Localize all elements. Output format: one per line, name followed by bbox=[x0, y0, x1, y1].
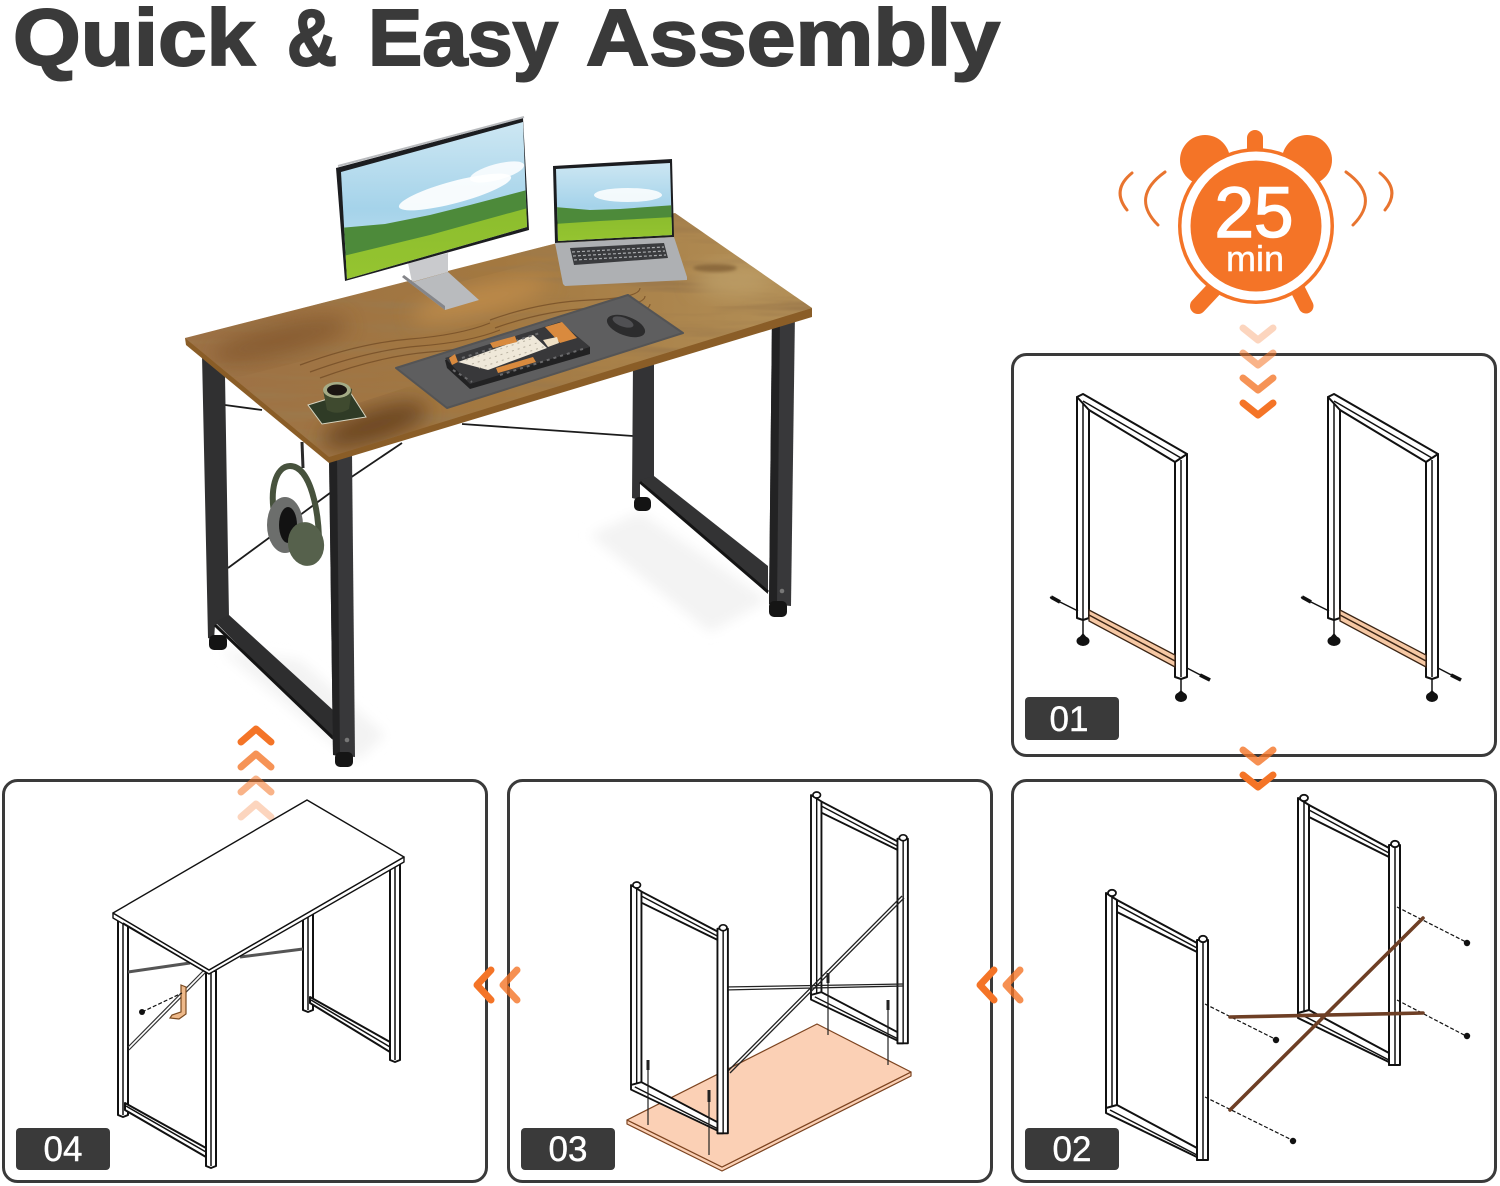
step 02 illustration: frames and cross rods bbox=[1106, 795, 1470, 1160]
rods bbox=[128, 949, 303, 972]
clock unit: min bbox=[1226, 238, 1284, 279]
panel: step 03 bbox=[508, 780, 992, 1182]
hook and headphones bbox=[267, 442, 328, 569]
brown rods bbox=[1230, 918, 1423, 1110]
arrow: step 03 to step 04 bbox=[477, 970, 517, 1000]
label 02 bbox=[1025, 1128, 1119, 1170]
step 04 illustration: assembled desk outline bbox=[113, 800, 404, 1168]
wood grain blotches bbox=[216, 213, 812, 456]
arrow: clock down to step 01 bbox=[1243, 328, 1273, 415]
arrow: step 01 to step 02 bbox=[1243, 750, 1273, 787]
label 01: 01 bbox=[1050, 700, 1088, 739]
laptop bbox=[552, 159, 687, 286]
title bbox=[13, 0, 1001, 82]
arrow: step 02 to step 03 bbox=[980, 970, 1020, 1000]
label 03: 03 bbox=[549, 1130, 587, 1169]
desktop board bbox=[627, 1024, 911, 1171]
clock label: 25 bbox=[1215, 174, 1293, 253]
legs bbox=[118, 858, 400, 1168]
label 04 bbox=[16, 1128, 110, 1170]
panel: step 01 bbox=[1012, 354, 1496, 756]
ringing waves bbox=[1120, 172, 1392, 225]
arrow: step 04 up to finished desk bbox=[241, 729, 271, 817]
step 03 illustration: board, frames, rods bbox=[627, 792, 911, 1171]
monitor bbox=[335, 117, 535, 285]
monitor stand bbox=[402, 253, 479, 310]
screws bbox=[1205, 907, 1470, 1144]
desk mat bbox=[396, 295, 683, 408]
back right leg bbox=[632, 358, 768, 594]
front left leg bbox=[329, 452, 355, 767]
desktop edge bbox=[185, 308, 812, 463]
panel: step 02 bbox=[1012, 780, 1496, 1182]
screws bbox=[648, 973, 888, 1155]
panel: step 04 bbox=[4, 780, 486, 1182]
finished desk photo illustration bbox=[185, 116, 812, 767]
coffee cup and saucer bbox=[308, 382, 366, 424]
mouse bbox=[604, 310, 648, 342]
label 04: 04 bbox=[44, 1130, 82, 1169]
keyboard bbox=[445, 322, 590, 389]
desktop outline bbox=[113, 800, 404, 974]
rods bbox=[724, 896, 904, 1073]
back left leg bbox=[202, 355, 333, 740]
wooden desktop bbox=[185, 213, 812, 457]
desk rods bbox=[225, 405, 633, 568]
floor shadows bbox=[221, 512, 768, 760]
headset hook bbox=[139, 985, 186, 1019]
alarm clock icon: 25 min bbox=[1120, 135, 1392, 306]
label 03 bbox=[521, 1128, 615, 1170]
label 01 bbox=[1025, 697, 1119, 740]
label 02: 02 bbox=[1053, 1130, 1091, 1169]
step 01 illustration: two leg frames bbox=[1050, 394, 1461, 702]
front right leg bbox=[769, 312, 795, 617]
